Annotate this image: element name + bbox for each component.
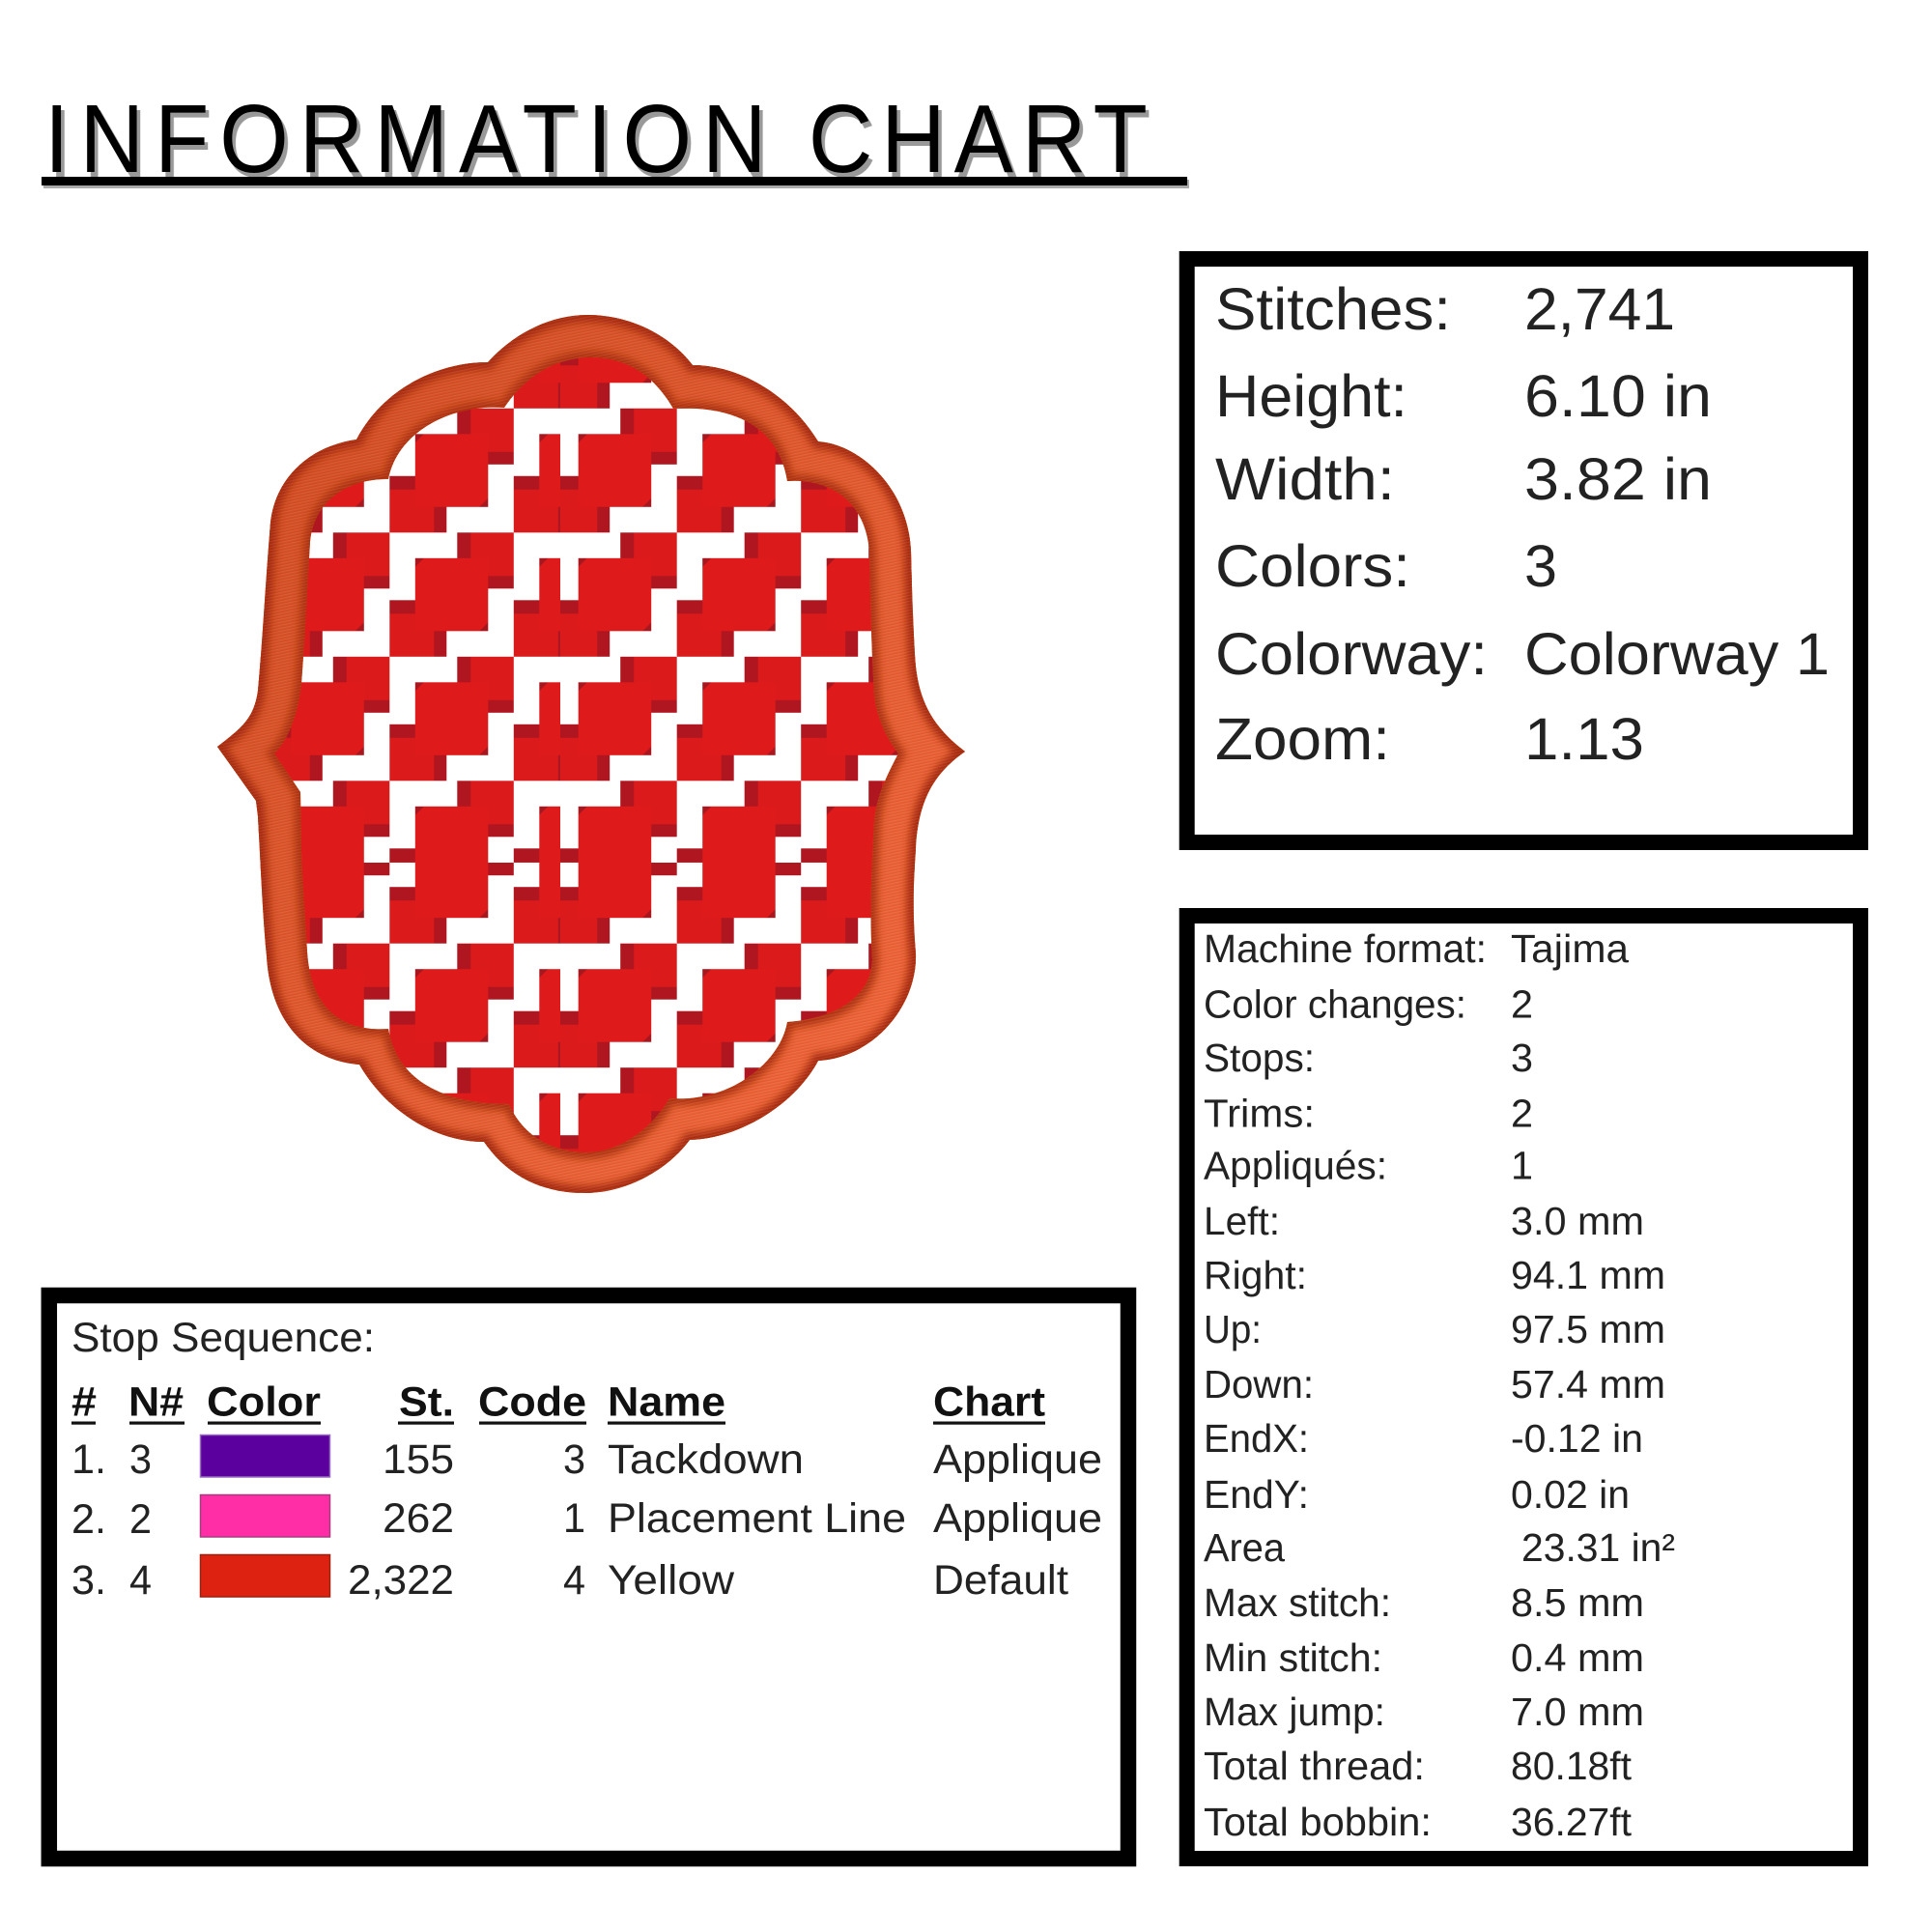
row: endx [1204,1416,1643,1461]
row: appliques [1204,1144,1533,1188]
row: width [1215,446,1712,513]
row: endx: EndX: [1204,1416,1309,1461]
row: up [1204,1307,1665,1351]
row: up: 97.5 mm [1511,1307,1665,1351]
row: endy: EndY: [1204,1472,1309,1517]
row: total bobbin: 36.27ft [1511,1800,1632,1844]
panel: design summary [1187,259,1861,842]
table row 1: 1. [71,1436,106,1483]
panel: stop sequence [49,1295,1128,1859]
row: zoom: Zoom: [1215,706,1390,773]
row: height: Height: [1215,363,1407,430]
row: total bobbin [1204,1800,1632,1844]
row: max jump: 7.0 mm [1511,1690,1644,1734]
table row 3: 4 [563,1557,585,1604]
table header row [71,1379,1045,1426]
table row 3: Yellow [608,1557,735,1604]
table header row: Color [207,1379,321,1426]
table row 3 [71,1555,1068,1604]
row: right: 94.1 mm [1511,1253,1665,1297]
panel heading: Stop Sequence: [71,1315,375,1361]
row: stops [1204,1036,1533,1080]
row: down: Down: [1204,1362,1314,1406]
row: right [1204,1253,1665,1297]
row: max stitch: 8.5 mm [1511,1580,1644,1625]
red and white stepped fabric pattern [213,309,976,1201]
row: stops: Stops: [1204,1036,1315,1080]
row: color changes: Color changes: [1204,981,1466,1026]
row: area [1204,1525,1675,1570]
table row 1: 3 [129,1436,152,1483]
row: total bobbin: Total bobbin: [1204,1800,1432,1844]
row: stitches [1215,276,1675,343]
table row 2: 1 [563,1495,585,1542]
row: endx: -0.12 in [1511,1416,1643,1461]
panel frame [49,1295,1128,1859]
row: stitches: Stitches: [1215,276,1451,343]
row: appliques: Appliqués: [1204,1144,1387,1188]
title text: INFORMATION CHART [44,85,1156,193]
row: max jump [1204,1690,1644,1734]
row: trims: Trims: [1204,1092,1315,1136]
table row 2: Placement Line [608,1495,906,1542]
table row 1: Applique [933,1436,1102,1483]
row: max jump: Max jump: [1204,1690,1385,1734]
row: appliques: 1 [1511,1144,1533,1188]
row: machine format: Machine format: [1204,926,1487,971]
row: min stitch: 0.4 mm [1511,1635,1644,1680]
table row 2: 262 [383,1495,454,1542]
row: total thread: 80.18ft [1511,1744,1632,1788]
title [42,85,1187,193]
table row 1 [71,1435,1102,1483]
row: endy: 0.02 in [1511,1472,1630,1517]
row: left [1204,1199,1644,1243]
row: right: Right: [1204,1253,1307,1297]
table row 1: 3 [563,1436,585,1483]
row: min stitch [1204,1635,1644,1680]
row: zoom: 1.13 [1524,706,1644,773]
table row 3: Default [933,1557,1068,1604]
row: height [1215,363,1712,430]
row: max stitch [1204,1580,1644,1625]
row: width: 3.82 in [1524,446,1712,513]
table row 2: 2 [129,1496,152,1543]
table row 2: 2. [71,1496,106,1543]
table row 3: 3. [71,1557,106,1604]
panel frame [1187,916,1861,1859]
panel frame [1187,259,1861,842]
table header row: Chart [933,1379,1045,1426]
table row 3: 4 [129,1557,152,1604]
row: colorway: Colorway 1 [1524,621,1830,688]
row: zoom [1215,706,1644,773]
table row 1: Tackdown [608,1436,804,1483]
row: stitches: 2,741 [1524,276,1675,343]
table header row: N# [128,1379,184,1426]
row: color changes: 2 [1511,981,1533,1026]
row: trims: 2 [1511,1092,1533,1136]
table row 2 [71,1495,1102,1543]
row: total thread: Total thread: [1204,1744,1425,1788]
row: down: 57.4 mm [1511,1362,1665,1406]
table header row: St. [399,1379,454,1426]
row: left: 3.0 mm [1511,1199,1644,1243]
row: machine format [1204,926,1629,971]
orange satin stitch border [213,309,976,1203]
table header row: Name [608,1379,725,1426]
table header row: Code [478,1379,586,1426]
table row 3: 2,322 [348,1557,454,1604]
row: machine format: Tajima [1511,926,1629,971]
row: stops: 3 [1511,1036,1533,1080]
row: colors [1215,533,1557,600]
row: width: Width: [1215,446,1395,513]
title underline [42,177,1187,185]
row: colors: 3 [1524,533,1557,600]
row: area: Area [1204,1525,1285,1570]
row: colorway [1215,621,1830,688]
row: area: 23.31 in² [1521,1525,1675,1570]
row: min stitch: Min stitch: [1204,1635,1382,1680]
row: endy [1204,1472,1630,1517]
row: max stitch: Max stitch: [1204,1580,1391,1625]
table row 2: Applique [933,1495,1102,1542]
row: colorway: Colorway: [1215,621,1488,688]
row: up: Up: [1204,1307,1262,1351]
table header row: # [71,1379,97,1426]
row: colors: Colors: [1215,533,1410,600]
embroidery design: scalloped applique patch [213,309,976,1203]
row: left: Left: [1204,1199,1280,1243]
row: height: 6.10 in [1524,363,1712,430]
row: down [1204,1362,1665,1406]
row: total thread [1204,1744,1632,1788]
panel: machine details [1187,916,1861,1859]
row: trims [1204,1092,1533,1136]
table row 1: 155 [383,1436,454,1483]
